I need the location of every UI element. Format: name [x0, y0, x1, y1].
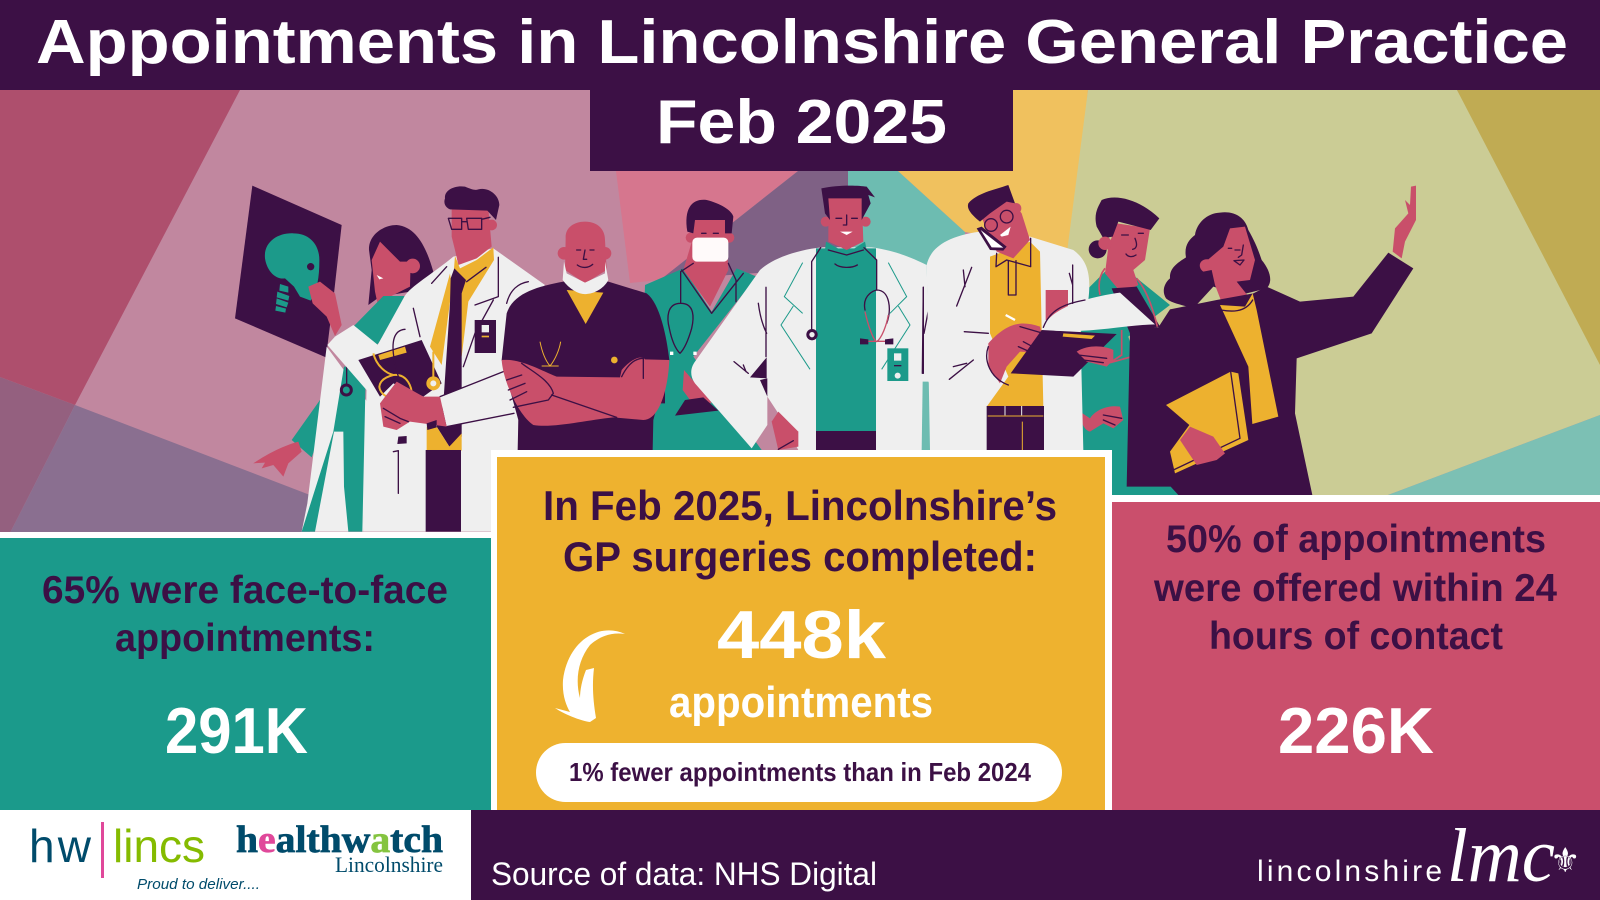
logo: hw lincs: [29, 820, 260, 893]
panel: offered within 24 hours: were offered within 24: [1153, 567, 1557, 610]
figure: nurse with bun behind: [1075, 197, 1179, 495]
panel: face-to-face appointments: [0, 532, 491, 810]
figure: woman in dark jacket waving with folder: [1127, 186, 1416, 495]
figure: nurse holding x-ray: [235, 186, 433, 532]
panel: offered within 24 hours: [1112, 495, 1600, 810]
logo: Healthwatch Lincolnshire: Lincolnshire: [335, 852, 443, 877]
background: geometric colour blocks: [0, 90, 1600, 540]
logo: lincolnshire lmc: ⚜: [1550, 841, 1580, 881]
figure: central doctor in white coat: [691, 186, 933, 450]
panel: total appointments: GP surgeries completed:: [563, 533, 1037, 580]
stat: 448k: 448k: [717, 597, 886, 673]
figure: masked nurse with stethoscope: [640, 200, 762, 450]
logo: hw lincs: lincs: [113, 820, 205, 872]
figure: doctor with tie and clipboard: [358, 186, 545, 532]
panel: offered within 24 hours: 50% of appointments: [1166, 518, 1546, 561]
logo: hw lincs: hw: [29, 820, 92, 872]
icon: curved down arrow: [555, 630, 625, 722]
logo: lincolnshire lmc: [1257, 814, 1580, 898]
callout: year on year change: 1% fewer appointments than in Feb 2024: [569, 757, 1031, 787]
label: appointments: appointments: [669, 678, 933, 727]
figure: bald man in scrubs with crossed arms: [502, 222, 669, 450]
subtitle: Feb 2025: Feb 2025: [656, 88, 947, 157]
logo: hw lincs: Proud to deliver....: [137, 876, 260, 893]
panel: offered within 24 hours: hours of contact: [1209, 615, 1503, 658]
stat: 226K: 226K: [1278, 694, 1434, 767]
title bar: [0, 0, 1600, 90]
figure: doctor on the phone with clipboard: [923, 185, 1155, 450]
panel: face-to-face appointments: appointments:: [115, 617, 375, 660]
panel: total appointments: In Feb 2025, Lincolnshire’s: [543, 482, 1057, 529]
callout: year on year change: [536, 743, 1062, 802]
footer: source bar: [471, 810, 1600, 900]
illustration: group of healthcare workers: [235, 185, 1416, 532]
logo: lincolnshire lmc: lincolnshire: [1257, 855, 1442, 888]
panel: total appointments: [491, 450, 1112, 810]
subtitle: Feb 2025: [590, 88, 1013, 171]
stat: 291K: 291K: [165, 694, 308, 767]
panel: face-to-face appointments: 65% were face-to-face: [42, 569, 448, 612]
logo: Healthwatch Lincolnshire: healthwatch: [236, 819, 443, 861]
source text: Source of data: NHS Digital: [491, 856, 877, 892]
title: Appointments in Lincolnshire General Practice: [36, 8, 1568, 77]
logo: lincolnshire lmc: lmc: [1447, 814, 1555, 898]
footer: partner logos: [0, 810, 471, 900]
